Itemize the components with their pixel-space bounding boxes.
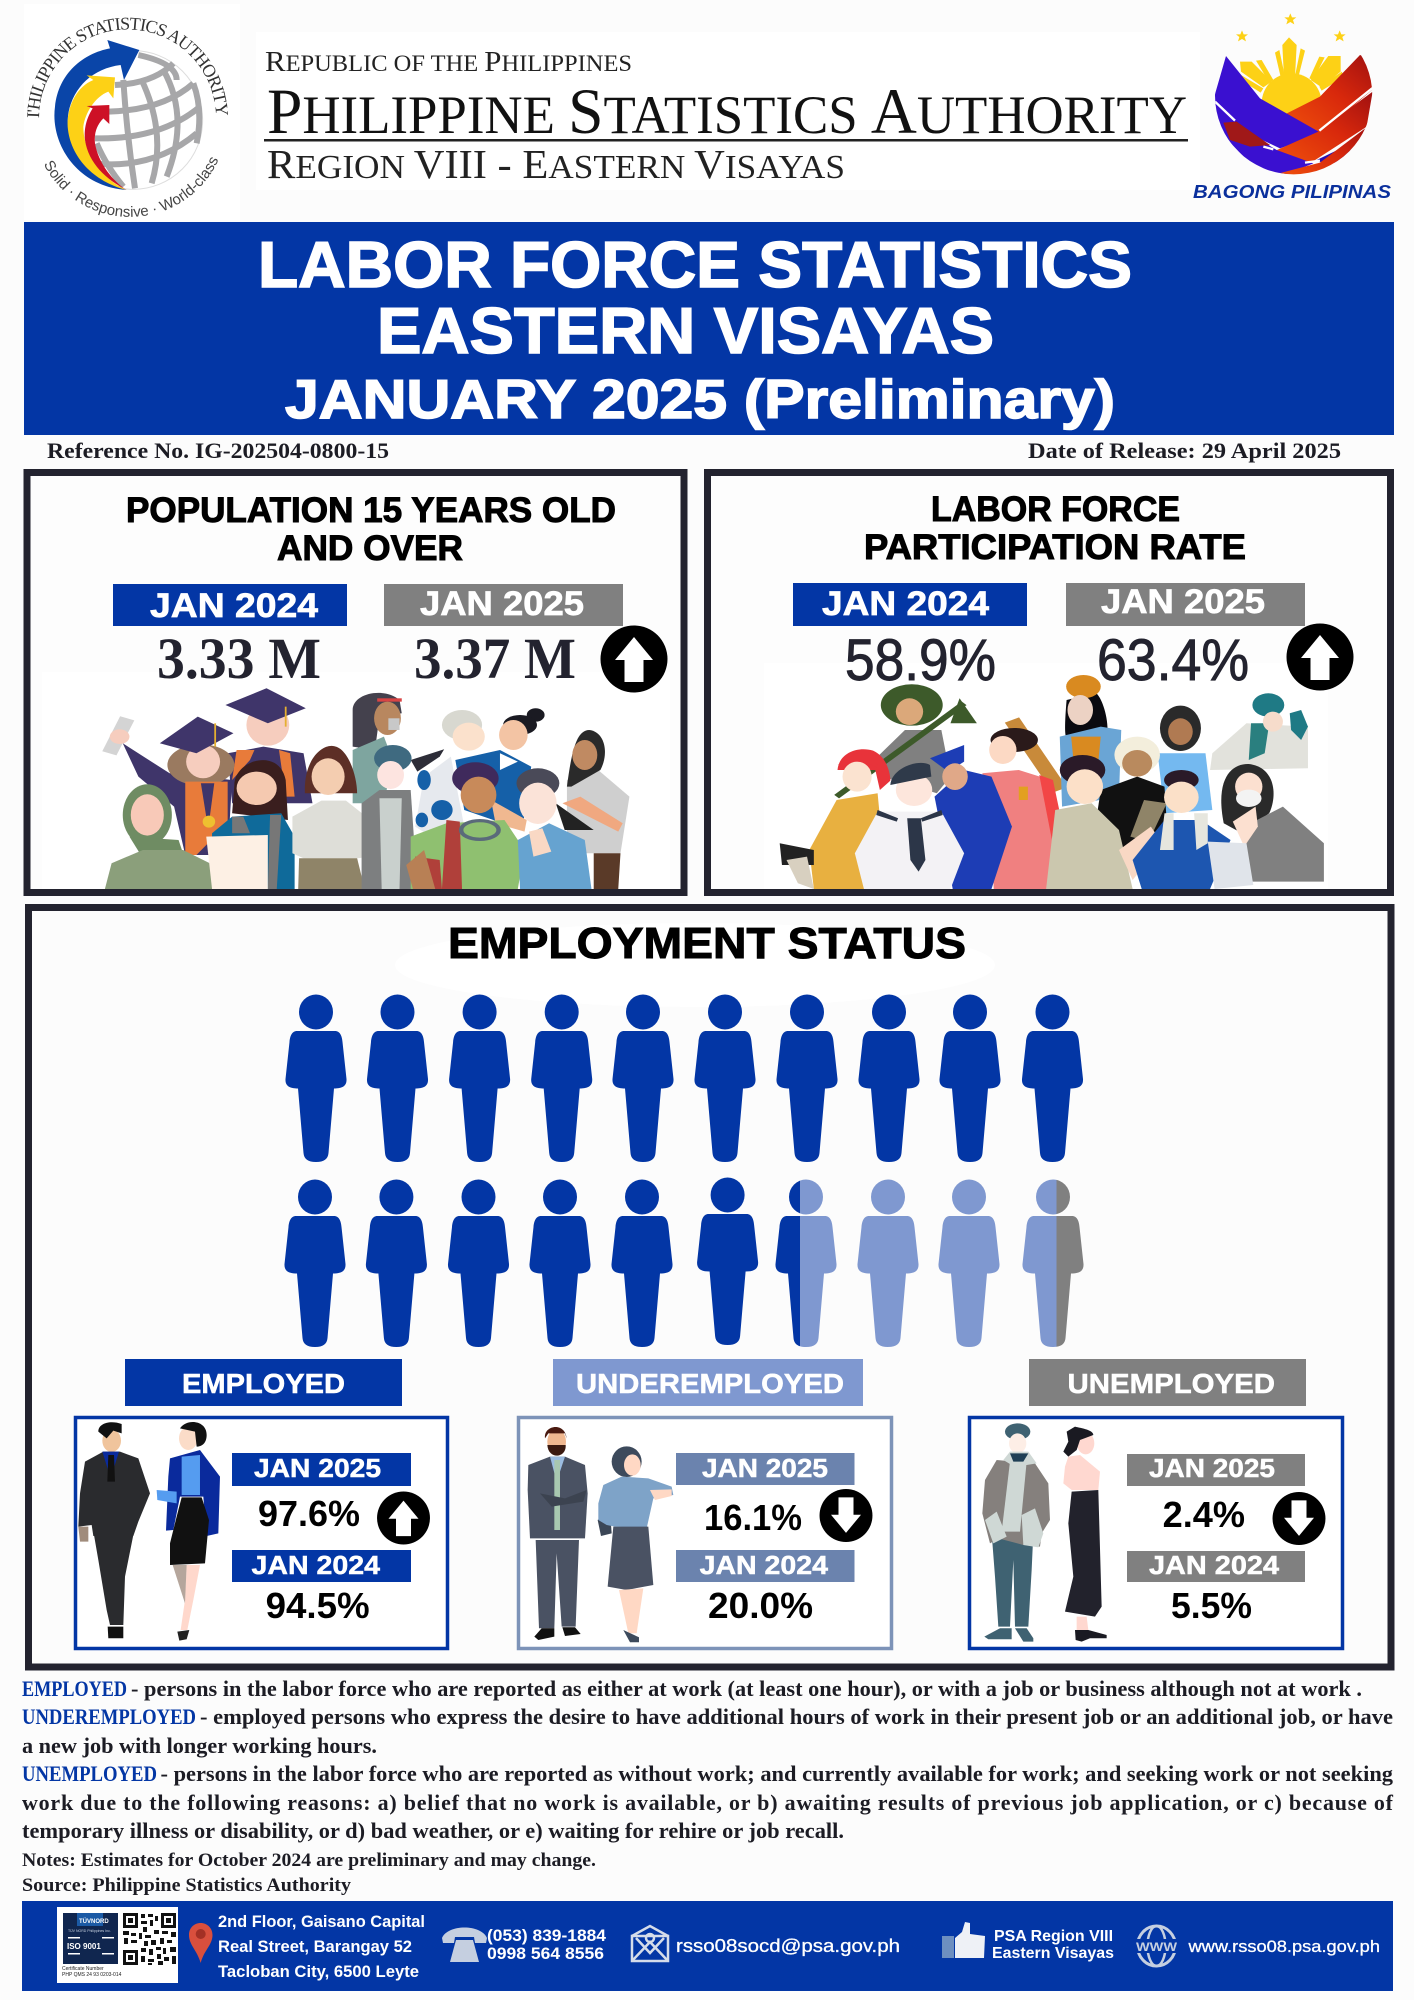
address: 2nd Floor, Gaisano Capital bbox=[218, 1912, 425, 1931]
email address: rsso08socd@psa.gov.ph bbox=[676, 1935, 900, 1956]
label: Jan 2024: JAN 2024 bbox=[1149, 1550, 1280, 1580]
footer bbox=[22, 1901, 1393, 1991]
icon: www globe bbox=[1134, 1926, 1179, 1966]
reference number: Reference No. IG-202504-0800-15 bbox=[47, 438, 389, 463]
panel: population 15 years old and over bbox=[27, 472, 684, 892]
logo: Bagong Pilipinas bbox=[1193, 13, 1392, 202]
address: Real Street, Barangay 52 bbox=[218, 1937, 412, 1956]
definition: unemployed bbox=[22, 1761, 1394, 1843]
icon: telephone bbox=[442, 1928, 487, 1962]
heading bbox=[126, 491, 616, 568]
icon: map pin bbox=[189, 1923, 212, 1963]
value: Jan 2025: 3.37 M bbox=[414, 626, 576, 691]
label: Jan 2025: JAN 2025 bbox=[1101, 583, 1265, 621]
icon: down arrow bbox=[1273, 1492, 1325, 1545]
definitions text block bbox=[22, 1676, 1394, 1896]
definition: underemployed: - employed persons who express the desire to have additional hours of work in their present job or an additional job, or have bbox=[200, 1704, 1393, 1729]
label: Jan 2025 bbox=[1066, 583, 1305, 626]
label: Jan 2025 bbox=[1127, 1453, 1305, 1486]
heading: LABOR FORCE bbox=[931, 490, 1180, 529]
logo: Bagong Pilipinas: BAGONG PILIPINAS bbox=[1193, 181, 1392, 202]
icon: thumbs up bbox=[942, 1922, 985, 1958]
value: 94.5%: 94.5% bbox=[266, 1585, 370, 1626]
card: unemployed bbox=[970, 1418, 1342, 1648]
ISO certificate and QR code: PHP QMS 24 93 0203-014 bbox=[62, 1972, 122, 1978]
ISO certificate and QR code: TÜVNORD bbox=[79, 1918, 109, 1925]
source: Source: Philippine Statistics Authority bbox=[22, 1875, 352, 1896]
value: Jan 2025: 63.4% bbox=[1097, 628, 1249, 693]
label: Jan 2025 bbox=[232, 1453, 411, 1486]
card: underemployed bbox=[518, 1418, 892, 1648]
ISO certificate and QR code: ISO 9001 bbox=[67, 1942, 101, 1951]
label: Jan 2025: JAN 2025 bbox=[420, 585, 584, 623]
definition: underemployed bbox=[22, 1704, 1393, 1758]
icon: up arrow bbox=[377, 1492, 430, 1544]
website: www.rsso08.psa.gov.ph bbox=[1187, 1937, 1380, 1956]
illustration: employed man and woman bbox=[78, 1422, 220, 1641]
label: Jan 2024 bbox=[676, 1550, 854, 1582]
value: Jan 2024: 3.33 M bbox=[157, 626, 321, 691]
label: Jan 2024: JAN 2024 bbox=[252, 1550, 381, 1580]
label: Jan 2025 bbox=[384, 584, 623, 626]
illustration: unemployed man and woman bbox=[982, 1423, 1107, 1642]
icon: up arrow bbox=[600, 626, 668, 692]
definition: unemployed: temporary illness or disability, or d) bad weather, or e) waiting for rehire or job recall. bbox=[22, 1818, 844, 1843]
label: unemployed bbox=[1029, 1359, 1306, 1406]
ISO certificate and QR code: TÜV NORD Philippines Inc. bbox=[68, 1929, 111, 1933]
social page name: Eastern Visayas bbox=[992, 1945, 1114, 1962]
title banner bbox=[24, 222, 1394, 435]
label: employed: EMPLOYED bbox=[182, 1368, 345, 1399]
icon: down arrow bbox=[820, 1489, 872, 1542]
value: 16.1%: 16.1% bbox=[704, 1497, 802, 1538]
label: Jan 2024 bbox=[1127, 1550, 1305, 1582]
pictogram row 2 bbox=[284, 1178, 1084, 1347]
label: Jan 2024: JAN 2024 bbox=[822, 585, 989, 623]
heading: POPULATION 15 YEARS OLD bbox=[126, 491, 616, 530]
label: Jan 2024 bbox=[232, 1550, 411, 1582]
label: Jan 2025: JAN 2025 bbox=[1149, 1453, 1275, 1483]
label: Jan 2024: JAN 2024 bbox=[150, 587, 318, 625]
definition: unemployed: work due to the following reasons: a) belief that no work is available, or b) awaiting results of previous job application, or c) because of bbox=[22, 1790, 1394, 1815]
definition: unemployed: UNEMPLOYED bbox=[22, 1761, 157, 1786]
illustration: underemployed man and woman bbox=[528, 1427, 673, 1642]
heading: EMPLOYMENT STATUS bbox=[448, 919, 966, 968]
title line 2: EASTERN VISAYAS bbox=[377, 294, 994, 367]
icon: www globe: WWW bbox=[1136, 1940, 1178, 1954]
illustration: group of people bbox=[42, 672, 670, 889]
address bbox=[218, 1912, 425, 1981]
social page name bbox=[992, 1928, 1114, 1962]
label: Jan 2024 bbox=[113, 584, 347, 626]
header: agency name bbox=[256, 32, 1200, 190]
title line 3: JANUARY 2025 (Preliminary) bbox=[285, 368, 1115, 430]
value: Jan 2024: 58.9% bbox=[845, 628, 996, 693]
title line 1: LABOR FORCE STATISTICS bbox=[258, 228, 1132, 301]
agency name: PHILIPPINE STATISTICS AUTHORITY bbox=[267, 76, 1187, 148]
card: employed bbox=[76, 1418, 448, 1648]
label: unemployed: UNEMPLOYED bbox=[1068, 1368, 1275, 1399]
notes: Notes: Estimates for October 2024 are preliminary and may change. bbox=[22, 1850, 596, 1871]
label: Jan 2025: JAN 2025 bbox=[254, 1453, 381, 1483]
phone numbers bbox=[487, 1926, 607, 1963]
value: 5.5%: 5.5% bbox=[1171, 1585, 1252, 1626]
logo: Philippine Statistics Authority seal: Solid · Responsive · World-class bbox=[45, 157, 218, 217]
label: Jan 2025 bbox=[676, 1453, 854, 1485]
value: 2.4%: 2.4% bbox=[1163, 1494, 1245, 1535]
heading: PARTICIPATION RATE bbox=[864, 528, 1246, 567]
label: Jan 2024 bbox=[793, 583, 1027, 626]
republic line: REPUBLIC OF THE PHILIPPINES bbox=[265, 46, 632, 78]
logo: Philippine Statistics Authority seal: I'HILIPPINE STATISTICS AUTHORITY bbox=[27, 18, 228, 118]
heading: AND OVER bbox=[277, 529, 463, 568]
label: employed bbox=[125, 1359, 402, 1406]
definition: unemployed: - persons in the labor force who are reported as without work; and currently available for work; and seeking work or not seeking bbox=[160, 1761, 1393, 1786]
ISO certificate and QR code: Certificate Number bbox=[62, 1966, 104, 1972]
heading bbox=[864, 490, 1246, 567]
definition: employed: - persons in the labor force who are reported as either at work (at least one hour), or with a job or business although not at work . bbox=[131, 1676, 1362, 1701]
address: Tacloban City, 6500 Leyte bbox=[218, 1962, 419, 1981]
ISO certificate and QR code bbox=[57, 1907, 178, 1983]
icon: up arrow bbox=[1286, 624, 1354, 690]
panel: employment status bbox=[28, 908, 1391, 1667]
illustration: workers bbox=[764, 663, 1328, 889]
definition: underemployed: UNDEREMPLOYED bbox=[22, 1704, 196, 1729]
definition: underemployed: a new job with longer working hours. bbox=[22, 1733, 377, 1758]
release date: Date of Release: 29 April 2025 bbox=[1028, 438, 1341, 463]
phone numbers: 0998 564 8556 bbox=[487, 1944, 604, 1963]
label: underemployed bbox=[553, 1359, 863, 1406]
value: 20.0%: 20.0% bbox=[708, 1585, 813, 1626]
social page name: PSA Region VIII bbox=[994, 1928, 1113, 1945]
logo: Philippine Statistics Authority seal bbox=[27, 18, 228, 217]
label: underemployed: UNDEREMPLOYED bbox=[576, 1368, 844, 1399]
icon: email envelope bbox=[632, 1926, 668, 1961]
region line: REGION VIII - EASTERN VISAYAS bbox=[267, 141, 845, 187]
panel: labor force participation rate bbox=[708, 472, 1390, 892]
definition: employed: EMPLOYED bbox=[22, 1676, 127, 1701]
label: Jan 2024: JAN 2024 bbox=[700, 1550, 829, 1580]
phone numbers: (053) 839-1884 bbox=[487, 1926, 607, 1945]
label: Jan 2025: JAN 2025 bbox=[702, 1453, 828, 1483]
value: 97.6%: 97.6% bbox=[258, 1493, 360, 1534]
pictogram row 1 bbox=[285, 994, 1083, 1162]
